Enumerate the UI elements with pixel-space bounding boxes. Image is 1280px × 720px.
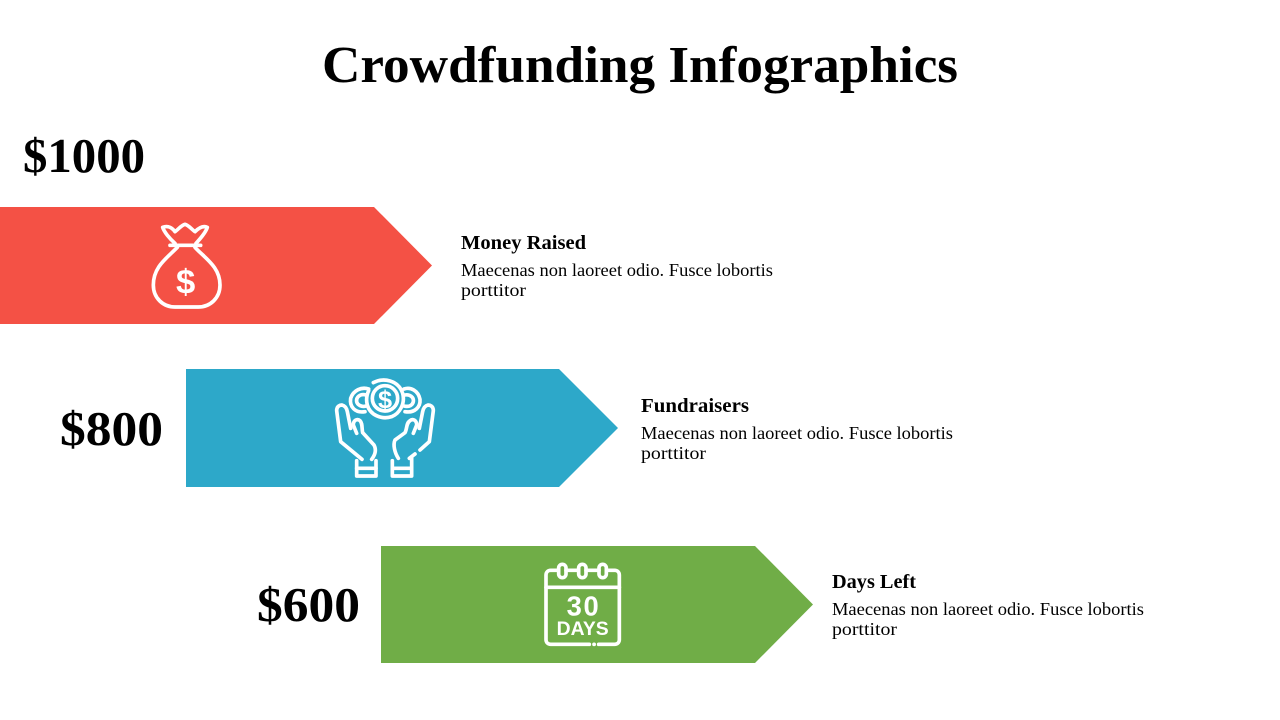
panel: fundraisers — [60, 369, 953, 487]
description: money raised: porttitor — [461, 280, 526, 300]
heading: days left: Days Left — [832, 571, 916, 593]
description: fundraisers — [641, 423, 953, 463]
value: $600: $600 — [257, 577, 360, 632]
icon: calendar 30 days: 30 — [567, 591, 599, 622]
description: days left: Maecenas non laoreet odio. Fusce lobortis — [832, 599, 1144, 619]
description: days left — [832, 599, 1144, 639]
heading: fundraisers: Fundraisers — [641, 395, 749, 417]
value: $800: $800 — [60, 401, 163, 456]
icon: money bag: $ — [176, 263, 195, 301]
description: fundraisers: porttitor — [641, 443, 706, 463]
arrow: blue — [186, 369, 618, 487]
panel: money raised — [0, 128, 773, 324]
icon: calendar 30 days: DAYS — [557, 619, 609, 640]
title: Crowdfunding Infographics — [322, 37, 958, 94]
value: $1000: $1000 — [23, 128, 145, 183]
icon: money bag — [153, 224, 220, 307]
panel: days left — [257, 546, 1144, 663]
arrow: red — [0, 207, 432, 324]
heading: money raised: Money Raised — [461, 232, 587, 254]
arrow: green — [381, 546, 813, 663]
description: money raised: Maecenas non laoreet odio. Fusce lobortis — [461, 260, 773, 280]
icon: hands holding coins: $ — [378, 386, 392, 414]
icon: calendar 30 days — [546, 564, 619, 644]
icon: hands holding coins — [337, 380, 433, 476]
description: money raised — [461, 260, 773, 300]
description: days left: porttitor — [832, 619, 897, 639]
description: fundraisers: Maecenas non laoreet odio. Fusce lobortis — [641, 423, 953, 443]
